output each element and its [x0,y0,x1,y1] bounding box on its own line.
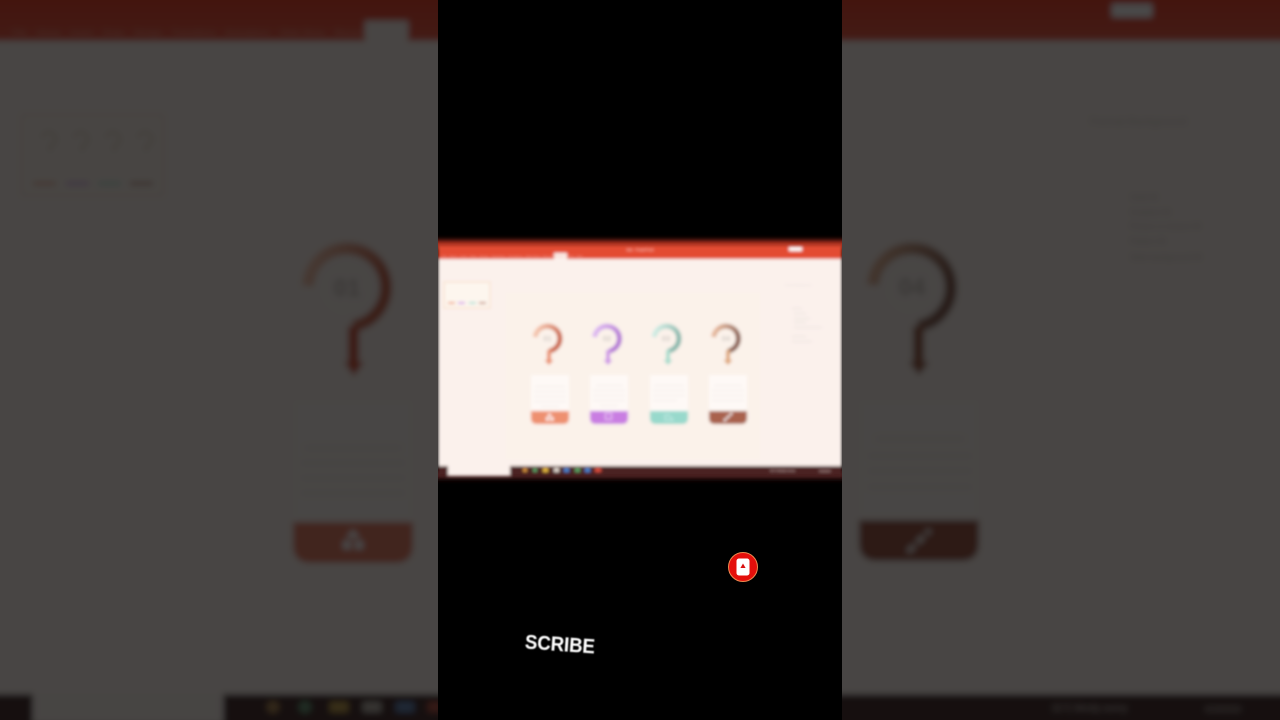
pane option 3: Picture or texture fill [1130,222,1201,231]
taskbar [438,466,842,476]
taskbar weather and clock: 31°C Mostly sunny [1052,703,1128,713]
subscribe caption: SCRIBE [524,632,596,658]
share button highlight [789,247,802,251]
thumbnail question marks [42,132,152,152]
thumbnail band marks [33,182,153,185]
ring 02 [594,326,619,351]
subscribe button icon [728,552,758,582]
band 04 with icon [709,411,747,424]
taskbar clock: 4/19/2024 [1205,705,1241,714]
text card 03 [651,376,687,410]
ribbon tabs: File Home Insert Draw Design Transitions Animations Slide Show Record Review View Help [442,254,583,258]
slide area [505,292,761,460]
card 01 box [293,400,413,563]
centre video frame [430,241,850,478]
window title bar [438,245,842,259]
pane option 2: Gradient fill [1130,208,1171,217]
taskbar app icons [267,701,442,713]
card 04 box [859,400,979,561]
arrow 02 [604,350,612,365]
share button [1112,4,1152,17]
step 03 [650,326,688,424]
bottom dark red glow [430,472,850,478]
band 02 with icon [590,411,628,424]
pane option 5: Slide background fill [1130,253,1202,262]
format pane: Format Background [785,283,812,287]
active tab [554,253,567,259]
pane options: Solid fill [1130,193,1158,202]
card 01 ring and stem: 01 [334,275,360,302]
slide thumbnail [22,115,163,195]
number 02: 02 [603,334,611,343]
slide thumbnail [444,282,490,308]
active ribbon tab [365,21,408,41]
ring 01 [535,326,560,351]
step 04 [709,326,747,424]
band 01 with icon [531,411,569,424]
number 03: 03 [662,334,670,343]
red top glow [430,241,850,247]
arrow 04 [724,350,732,365]
taskbar clock: 4/19/2024 [819,469,831,473]
arrow 03 [664,350,672,365]
taskbar search box [448,466,510,476]
ring 03 [654,326,679,351]
slide window background [438,245,842,467]
title bar [0,0,1280,41]
file name: Ads - PowerPoint [626,248,654,252]
text card 02 [591,376,627,410]
pane option 4: Pattern fill [1130,237,1166,246]
ring 04 [714,326,738,351]
number 01: 01 [543,334,552,343]
taskbar icons [523,468,601,472]
step 02 [590,326,628,424]
taskbar search box [33,694,223,720]
ribbon tab labels: File Home Insert Draw Design Transitions Animations Slide Show Record [12,28,364,38]
card 04 ring and stem [873,248,951,375]
taskbar weather: 31°C Mostly sunny [770,468,796,472]
arrow 01 [544,350,554,365]
right format pane: Format Background [1090,116,1187,128]
card 04 ring and stem: 04 [899,274,926,301]
format pane [785,283,822,342]
number 04: 04 [722,334,731,343]
band 03 with icon [650,411,688,424]
card 01 ring and stem [308,248,386,376]
text card 01 [532,376,568,411]
centre black column [438,0,842,720]
text card 04 [710,376,746,411]
windows taskbar [0,694,1280,720]
step 01 [531,326,569,424]
